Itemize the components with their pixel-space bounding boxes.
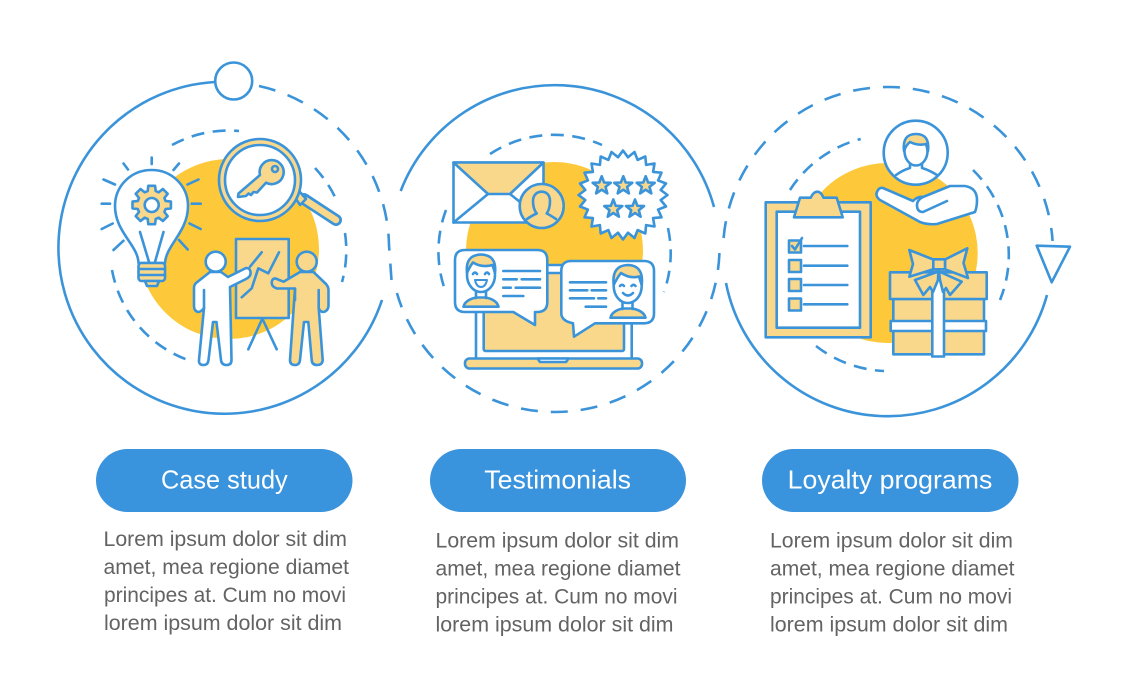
inner dashed ring [112, 131, 346, 360]
icon: colleague [272, 252, 328, 365]
panel: testimonials [397, 85, 719, 637]
outer ring [58, 62, 392, 414]
text block: testimonials: lorem ipsum dolor sit dim [436, 614, 674, 636]
text block: testimonials: Lorem ipsum dolor sit dim [436, 530, 679, 552]
inner dashed ring [790, 139, 1009, 371]
pill heading: loyalty programs [762, 449, 1018, 512]
yellow backdrop circle [466, 162, 643, 339]
icon: gift box [890, 248, 987, 356]
text block: testimonials [436, 530, 681, 636]
panel: loyalty programs [724, 87, 1070, 636]
text block: case study: amet, mea regione diamet [104, 556, 349, 579]
inner dashed ring [438, 135, 671, 292]
text block: loyalty programs [770, 530, 1015, 636]
icon: clipboard checklist [766, 192, 871, 337]
yellow backdrop circle [798, 163, 978, 343]
text block: loyalty programs: principes at. Cum no movi [770, 586, 1012, 608]
text block: case study [104, 528, 349, 635]
pill heading: case study [96, 449, 352, 512]
pill heading: case study: Case study [161, 464, 288, 494]
pill heading: loyalty programs: Loyalty programs [788, 464, 992, 494]
speech bubble: smiling customer [561, 261, 654, 337]
speech bubble: laughing customer [455, 250, 547, 325]
yellow backdrop circle [139, 159, 319, 339]
icon: open hand [876, 186, 977, 224]
panel: case study [58, 62, 392, 635]
text block: case study: principes at. Cum no movi [104, 584, 346, 607]
icon: envelope with contact [454, 162, 564, 228]
icon: magnifier with key [219, 139, 336, 221]
text block: testimonials: principes at. Cum no movi [436, 586, 678, 608]
icon: laptop [465, 265, 642, 368]
text block: loyalty programs: lorem ipsum dolor sit dim [770, 614, 1008, 636]
icon: customer in circle [884, 121, 948, 185]
icon: light bulb with gear [102, 158, 201, 286]
text block: loyalty programs: amet, mea regione diamet [770, 558, 1015, 580]
text block: case study: Lorem ipsum dolor sit dim [104, 528, 347, 551]
text block: case study: lorem ipsum dolor sit dim [104, 612, 342, 635]
outer ring with arrow [724, 87, 1070, 416]
icon: presenter [194, 252, 251, 365]
icon: star rating badge [578, 150, 668, 240]
text block: loyalty programs: Lorem ipsum dolor sit dim [770, 530, 1013, 552]
icon: chart board [236, 239, 289, 349]
pill heading: testimonials: Testimonials [484, 464, 631, 494]
outer ring [397, 85, 719, 412]
pill heading: testimonials [430, 449, 686, 512]
text block: testimonials: amet, mea regione diamet [436, 558, 681, 580]
